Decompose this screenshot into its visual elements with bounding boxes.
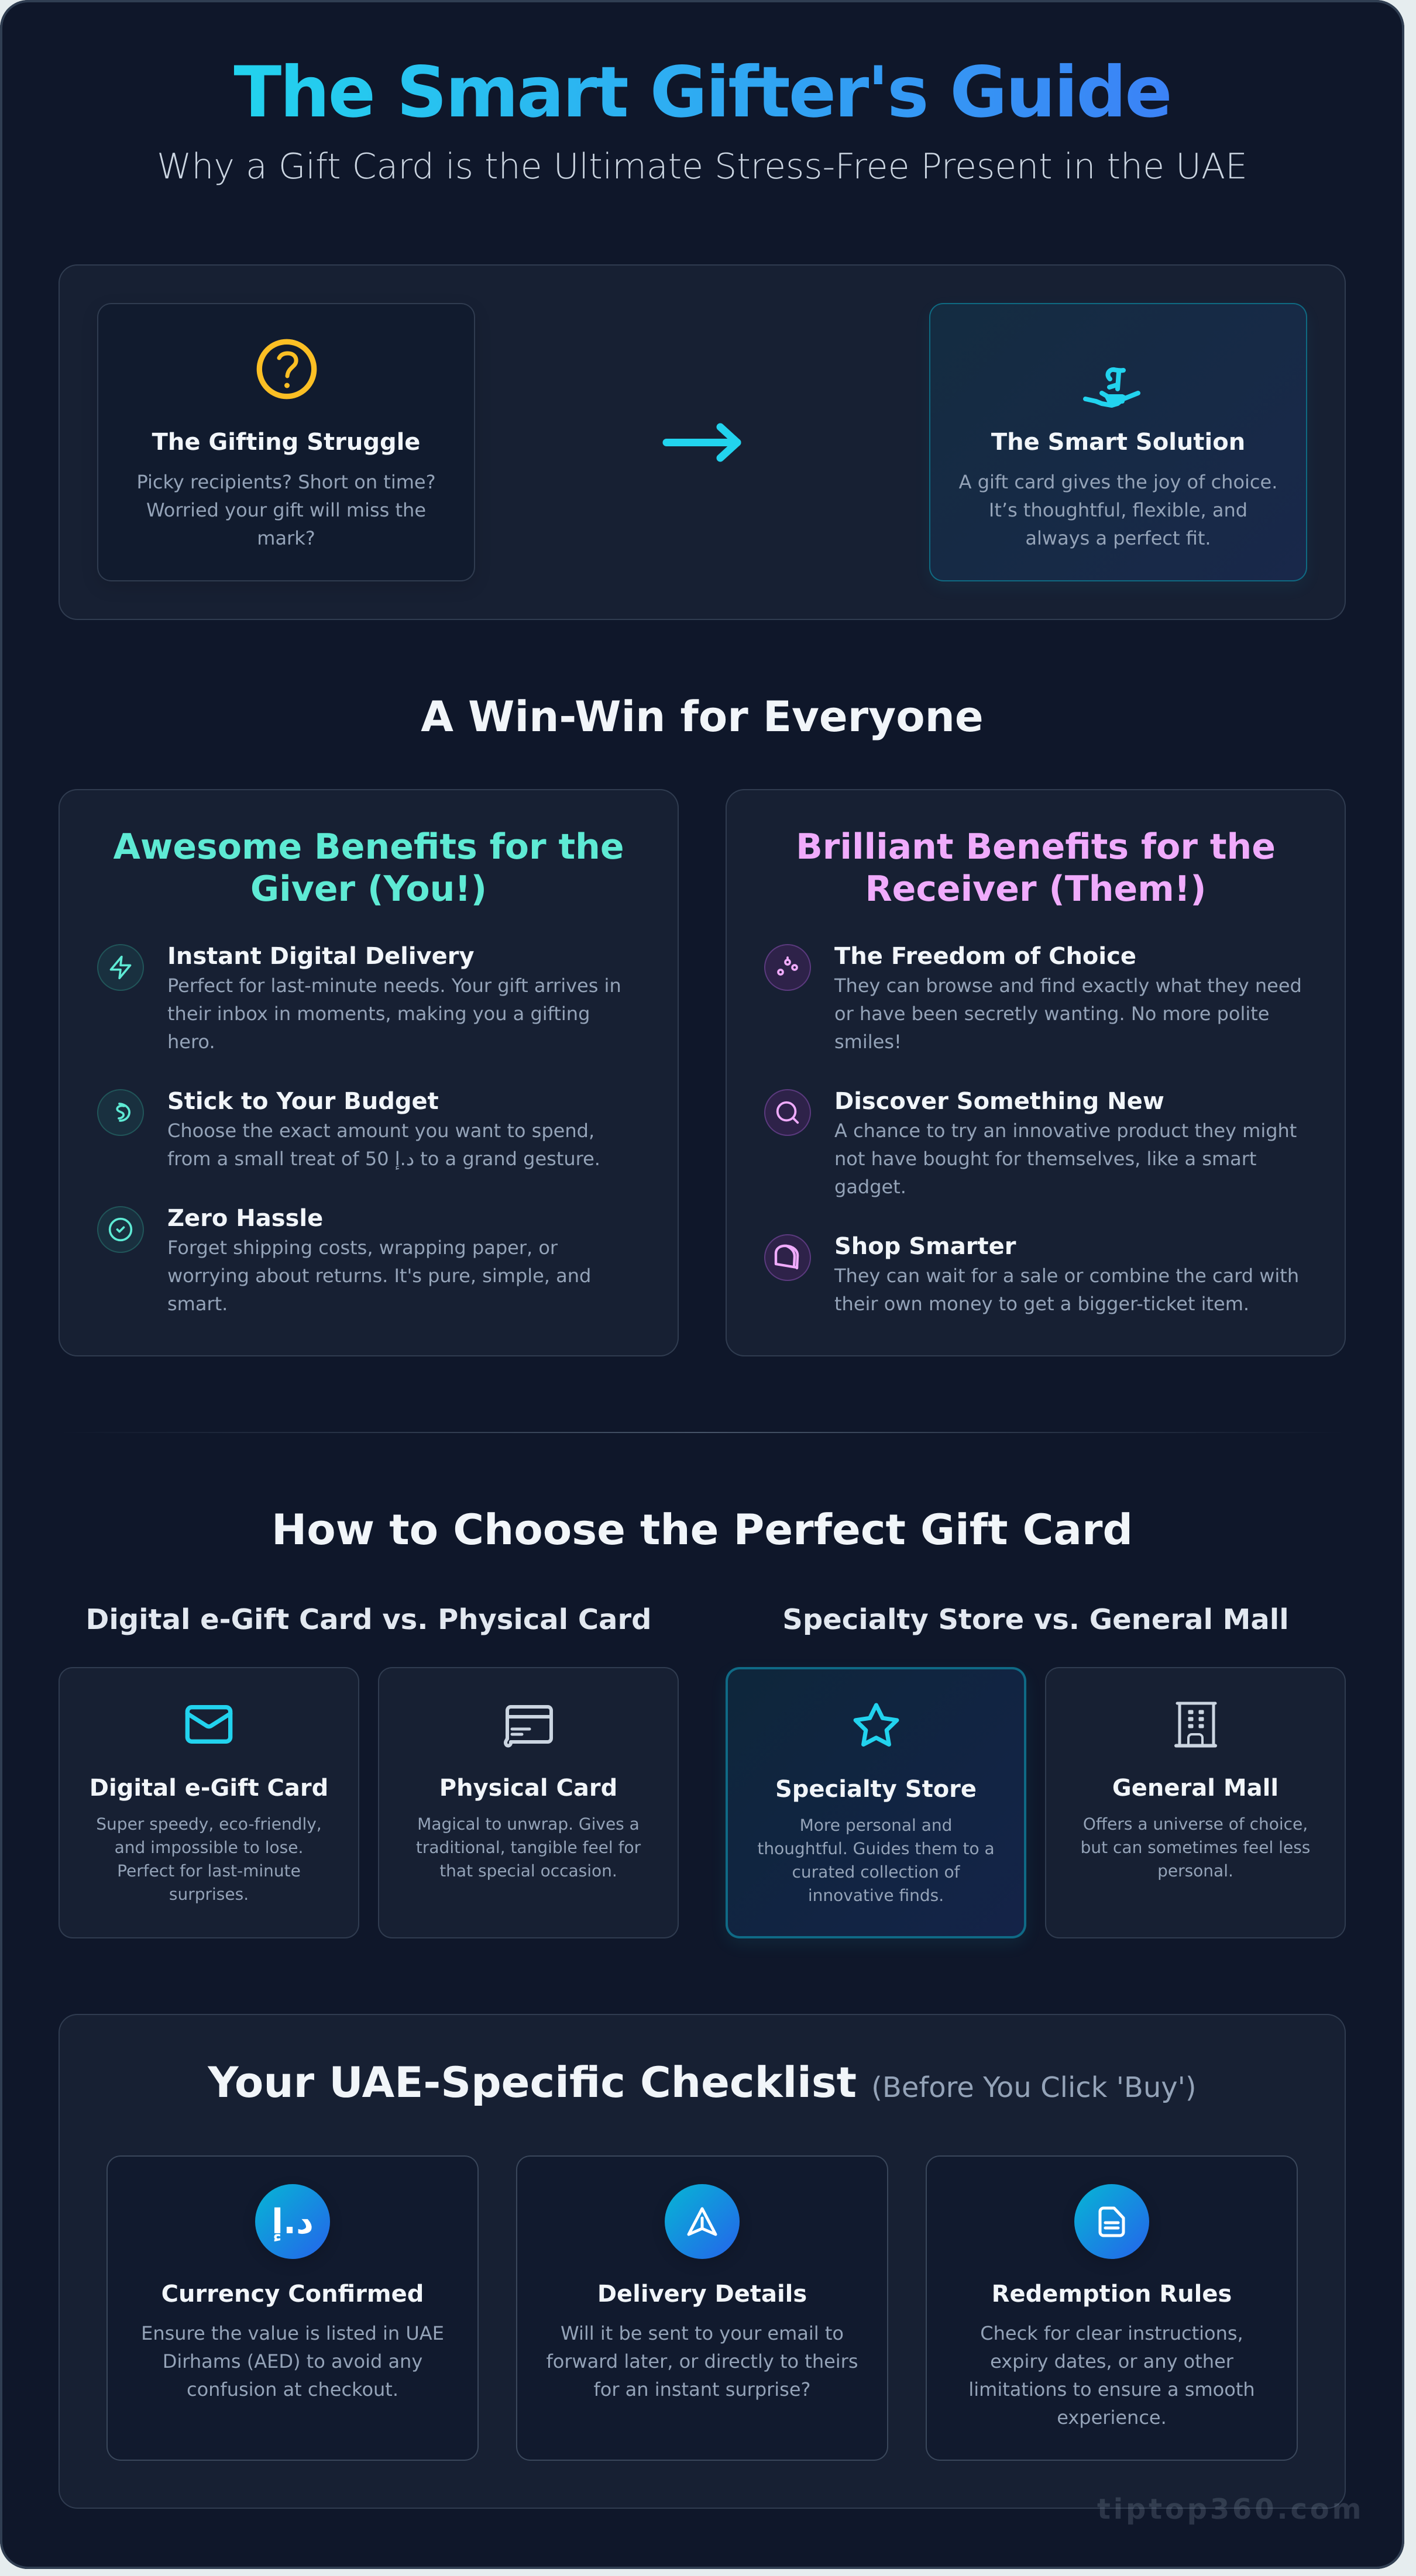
benefit title: Stick to Your Budget	[167, 1088, 439, 1115]
card: digital e-gift card	[59, 1667, 359, 1938]
benefit: stick to your budget	[97, 1088, 600, 1170]
icon: building	[1172, 1699, 1219, 1749]
benefit text	[834, 1120, 1297, 1198]
benefit text	[834, 1265, 1299, 1315]
benefit text	[167, 1237, 591, 1315]
description: It’s thoughtful, flexible, and	[989, 499, 1247, 521]
card text: forward later, or directly to theirs	[546, 2350, 858, 2372]
benefit text	[167, 974, 621, 1053]
description: Worried your gift will miss the	[146, 499, 426, 521]
card text: innovative finds.	[808, 1886, 944, 1905]
card text: confusion at checkout.	[187, 2378, 398, 2401]
card: the gifting struggle	[97, 303, 475, 581]
benefit: the freedom of choice	[764, 943, 1302, 1053]
card title: Currency Confirmed	[161, 2281, 424, 2308]
card text: and impossible to lose.	[115, 1838, 303, 1857]
card title: Physical Card	[439, 1775, 617, 1802]
comparison: digital vs physical	[59, 1603, 679, 1938]
benefit text: Forget shipping costs, wrapping paper, or	[167, 1237, 558, 1259]
benefit text	[834, 974, 1302, 1053]
card text: More personal and	[800, 1816, 952, 1834]
icon: dirham symbol: د.إ	[271, 2202, 314, 2241]
arrow	[662, 423, 741, 462]
benefit text: Choose the exact amount you want to spend,	[167, 1120, 594, 1142]
card: physical card	[378, 1667, 679, 1938]
card: redemption rules	[926, 2155, 1298, 2461]
card text	[59, 1813, 359, 1906]
card text: Offers a universe of choice,	[1083, 1814, 1308, 1834]
benefit: instant digital delivery	[97, 943, 621, 1053]
benefit title: The Freedom of Choice	[834, 943, 1136, 970]
card text	[106, 2319, 479, 2403]
card title: Delivery Details	[597, 2281, 807, 2308]
heading: how to choose: How to Choose the Perfect Gift Card	[271, 1505, 1133, 1554]
card text: that special occasion.	[439, 1861, 617, 1881]
benefit text: smiles!	[834, 1031, 902, 1053]
card text: traditional, tangible feel for	[416, 1838, 641, 1857]
panel: benefits for the giver	[59, 789, 679, 1356]
benefit text: their own money to get a bigger-ticket item.	[834, 1293, 1249, 1315]
benefit title: Zero Hassle	[167, 1205, 323, 1232]
card text: Super speedy, eco-friendly,	[96, 1814, 322, 1834]
description: A gift card gives the joy of choice.	[959, 471, 1277, 493]
description: mark?	[257, 527, 315, 549]
icon: dirham symbol	[255, 2184, 330, 2259]
card text	[1045, 1813, 1346, 1883]
benefit: discover something new	[764, 1088, 1297, 1198]
panel: benefits for the receiver	[726, 789, 1346, 1356]
description	[136, 471, 436, 549]
card text: Check for clear instructions,	[980, 2322, 1243, 2344]
panel: UAE checklist	[59, 2014, 1346, 2509]
card text: for an instant surprise?	[593, 2378, 811, 2401]
benefit text	[167, 1120, 600, 1170]
icon: credit card	[499, 1699, 558, 1752]
card text: limitations to ensure a smooth	[968, 2378, 1255, 2401]
card: general mall	[1045, 1667, 1346, 1938]
card title: Specialty Store	[775, 1776, 977, 1803]
card: delivery details	[516, 2155, 888, 2461]
card text: thoughtful. Guides them to a	[757, 1839, 995, 1858]
icon: question mark	[256, 339, 317, 399]
title: The Smart Gifter's Guide	[233, 51, 1171, 133]
card: the smart solution	[929, 303, 1307, 581]
benefit text: A chance to try an innovative product they might	[834, 1120, 1297, 1142]
description: always a perfect fit.	[1025, 527, 1211, 549]
icon: palette dots	[764, 944, 811, 991]
card text	[378, 1813, 679, 1883]
card: currency confirmed	[106, 2155, 479, 2461]
benefit text: from a small treat of 50 د.إ to a grand gesture.	[167, 1148, 600, 1170]
card text	[516, 2319, 888, 2403]
benefit text: hero.	[167, 1031, 215, 1053]
card text	[926, 2319, 1298, 2432]
benefit text: worrying about returns. It's pure, simple, and	[167, 1265, 591, 1287]
card text: curated collection of	[792, 1862, 960, 1881]
icon: document	[1074, 2184, 1149, 2259]
watermark: tiptop360.com	[1097, 2493, 1364, 2526]
checklist heading: Your UAE-Specific Checklist (Before You Click 'Buy')	[208, 2058, 1197, 2107]
icon: check circle	[97, 1206, 144, 1253]
panel: struggle to solution	[59, 264, 1346, 620]
panel heading: Awesome Benefits for the	[113, 826, 624, 867]
subtitle: Why a Gift Card is the Ultimate Stress-Free Present in the UAE	[157, 146, 1247, 187]
card title: Digital e-Gift Card	[90, 1775, 328, 1802]
benefit text: not have bought for themselves, like a smart	[834, 1148, 1256, 1170]
description: Picky recipients? Short on time?	[136, 471, 436, 493]
benefit text: They can wait for a sale or combine the card with	[834, 1265, 1299, 1287]
benefit: zero hassle	[97, 1205, 591, 1315]
card text: expiry dates, or any other	[990, 2350, 1233, 2372]
icon: magnifying glass	[764, 1089, 811, 1136]
benefit text: or have been secretly wanting. No more polite	[834, 1003, 1269, 1025]
card title: General Mall	[1112, 1775, 1278, 1802]
benefit text: smart.	[167, 1293, 228, 1315]
card text: Dirhams (AED) to avoid any	[163, 2350, 422, 2372]
card text: but can sometimes feel less	[1081, 1838, 1310, 1857]
card text	[726, 1813, 1026, 1907]
comparison heading: Digital e-Gift Card vs. Physical Card	[86, 1603, 651, 1636]
benefit title: Shop Smarter	[834, 1233, 1016, 1260]
panel heading	[796, 826, 1276, 909]
benefit text: They can browse and find exactly what they need	[834, 974, 1302, 997]
icon: navigation arrow	[665, 2184, 740, 2259]
panel heading: Giver (You!)	[250, 868, 487, 909]
panel heading: Brilliant Benefits for the	[796, 826, 1276, 867]
icon: gift hands	[1083, 367, 1140, 408]
card text: Perfect for last-minute	[117, 1861, 301, 1881]
comparison heading: Specialty Store vs. General Mall	[782, 1603, 1289, 1636]
icon: shop arch	[764, 1234, 811, 1281]
card text: Will it be sent to your email to	[561, 2322, 844, 2344]
card text: experience.	[1057, 2406, 1167, 2429]
card title: Redemption Rules	[992, 2281, 1232, 2308]
icon: budget coin	[97, 1089, 144, 1136]
card text: Magical to unwrap. Gives a	[417, 1814, 640, 1834]
benefit title: Instant Digital Delivery	[167, 943, 475, 970]
panel heading: Receiver (Them!)	[865, 868, 1207, 909]
heading: The Smart Solution	[991, 429, 1245, 456]
heading: The Gifting Struggle	[152, 429, 420, 456]
card: specialty store	[726, 1667, 1026, 1938]
description	[959, 471, 1277, 549]
benefit title: Discover Something New	[834, 1088, 1164, 1115]
heading: win-win: A Win-Win for Everyone	[421, 692, 984, 741]
card text: personal.	[1157, 1861, 1233, 1881]
benefit text: gadget.	[834, 1176, 906, 1198]
panel heading	[113, 826, 624, 909]
benefit: shop smarter	[764, 1233, 1299, 1315]
card text: Ensure the value is listed in UAE	[141, 2322, 444, 2344]
benefit text: Perfect for last-minute needs. Your gift arrives in	[167, 974, 621, 997]
benefit text: their inbox in moments, making you a gifting	[167, 1003, 590, 1025]
icon: envelope	[185, 1705, 233, 1744]
icon: lightning bolt	[97, 944, 144, 991]
comparison: specialty vs general	[726, 1597, 1346, 1938]
icon: star	[851, 1701, 901, 1750]
card text: surprises.	[169, 1885, 249, 1904]
